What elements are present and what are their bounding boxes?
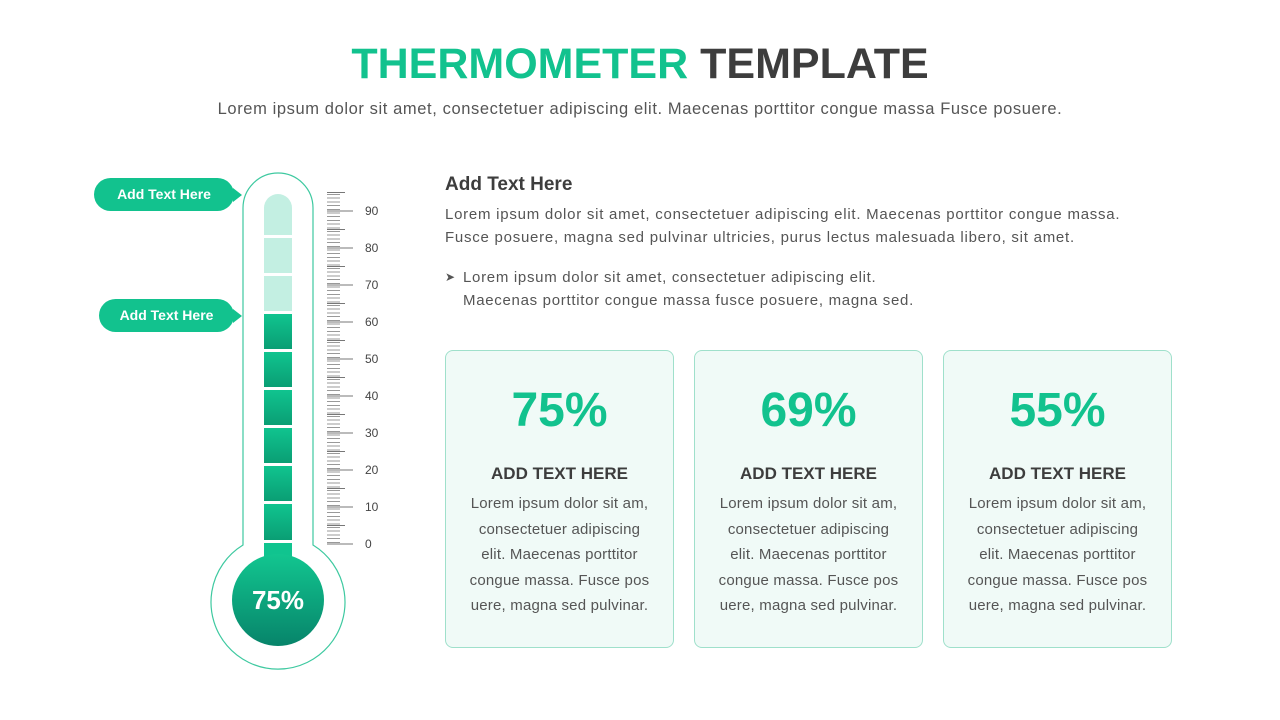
bullet: Lorem ipsum dolor sit amet, consectetuer adipiscing elit. bbox=[463, 269, 876, 286]
title: THERMOMETER TEMPLATE bbox=[351, 40, 929, 88]
thermometer bbox=[210, 172, 379, 670]
callout: middle: Add Text Here bbox=[120, 307, 213, 323]
bullet bbox=[445, 269, 914, 309]
callout: middle bbox=[99, 299, 234, 332]
card: 55%: congue massa. Fusce pos bbox=[968, 572, 1147, 588]
callout: top: Add Text Here bbox=[117, 186, 211, 202]
bullet: Maecenas porttitor congue massa fusce posuere, magna sed. bbox=[463, 292, 914, 309]
card: 69%: elit. Maecenas porttitor bbox=[730, 546, 887, 563]
card: 55%: consectetuer adipiscing bbox=[977, 520, 1138, 538]
scale labels: 70 bbox=[365, 278, 379, 292]
card: 75%: uere, magna sed pulvinar. bbox=[471, 597, 648, 614]
card: 69%: congue massa. Fusce pos bbox=[719, 572, 898, 588]
paragraph: Lorem ipsum dolor sit amet, consectetuer adipiscing elit. Maecenas porttitor congue massa. bbox=[445, 206, 1120, 223]
scale labels: 60 bbox=[365, 315, 379, 329]
card: 69%: Lorem ipsum dolor sit am, bbox=[720, 495, 897, 512]
bulb bbox=[232, 554, 324, 646]
bullet: ➤ bbox=[445, 270, 456, 284]
callout: top bbox=[94, 178, 234, 211]
card: 69%: uere, magna sed pulvinar. bbox=[720, 597, 897, 614]
subtitle: Lorem ipsum dolor sit amet, consectetuer adipiscing elit. Maecenas porttitor congue massa Fusce posuere. bbox=[218, 100, 1062, 118]
card: 75%: Lorem ipsum dolor sit am, bbox=[471, 495, 648, 512]
card: 55%: elit. Maecenas porttitor bbox=[979, 546, 1136, 563]
scale labels: 0 bbox=[365, 537, 372, 551]
scale labels: 50 bbox=[365, 352, 379, 366]
bulb: 75% bbox=[252, 585, 304, 615]
card: 75%: 75% bbox=[511, 384, 608, 437]
card: 55%: Lorem ipsum dolor sit am, bbox=[969, 495, 1146, 512]
scale labels: 20 bbox=[365, 463, 379, 477]
card: 75%: congue massa. Fusce pos bbox=[470, 572, 649, 588]
scale bbox=[327, 192, 353, 544]
scale labels: 30 bbox=[365, 426, 379, 440]
scale labels bbox=[365, 204, 379, 551]
card: 75%: elit. Maecenas porttitor bbox=[481, 546, 638, 563]
heading: Add Text Here bbox=[445, 174, 572, 195]
scale labels: 80 bbox=[365, 241, 379, 255]
card: 55% bbox=[943, 350, 1172, 648]
card: 69%: ADD TEXT HERE bbox=[740, 464, 877, 483]
card: 69%: 69% bbox=[760, 384, 857, 437]
card: 69% bbox=[694, 350, 923, 648]
card: 69%: consectetuer adipiscing bbox=[728, 520, 889, 538]
card: 55%: 55% bbox=[1009, 384, 1106, 437]
scale labels: 90 bbox=[365, 204, 379, 218]
card: 55%: ADD TEXT HERE bbox=[989, 464, 1126, 483]
card: 55%: uere, magna sed pulvinar. bbox=[969, 597, 1146, 614]
paragraph bbox=[445, 206, 1120, 246]
card: 75%: ADD TEXT HERE bbox=[491, 464, 628, 483]
card: 75% bbox=[445, 350, 674, 648]
thermometer outline bbox=[211, 173, 345, 669]
card: 75%: consectetuer adipiscing bbox=[479, 520, 640, 538]
scale labels: 40 bbox=[365, 389, 379, 403]
scale labels: 10 bbox=[365, 500, 379, 514]
column segments bbox=[264, 194, 292, 568]
paragraph: Fusce posuere, magna sed pulvinar ultricies, purus lectus malesuada libero, sit amet. bbox=[445, 229, 1075, 246]
